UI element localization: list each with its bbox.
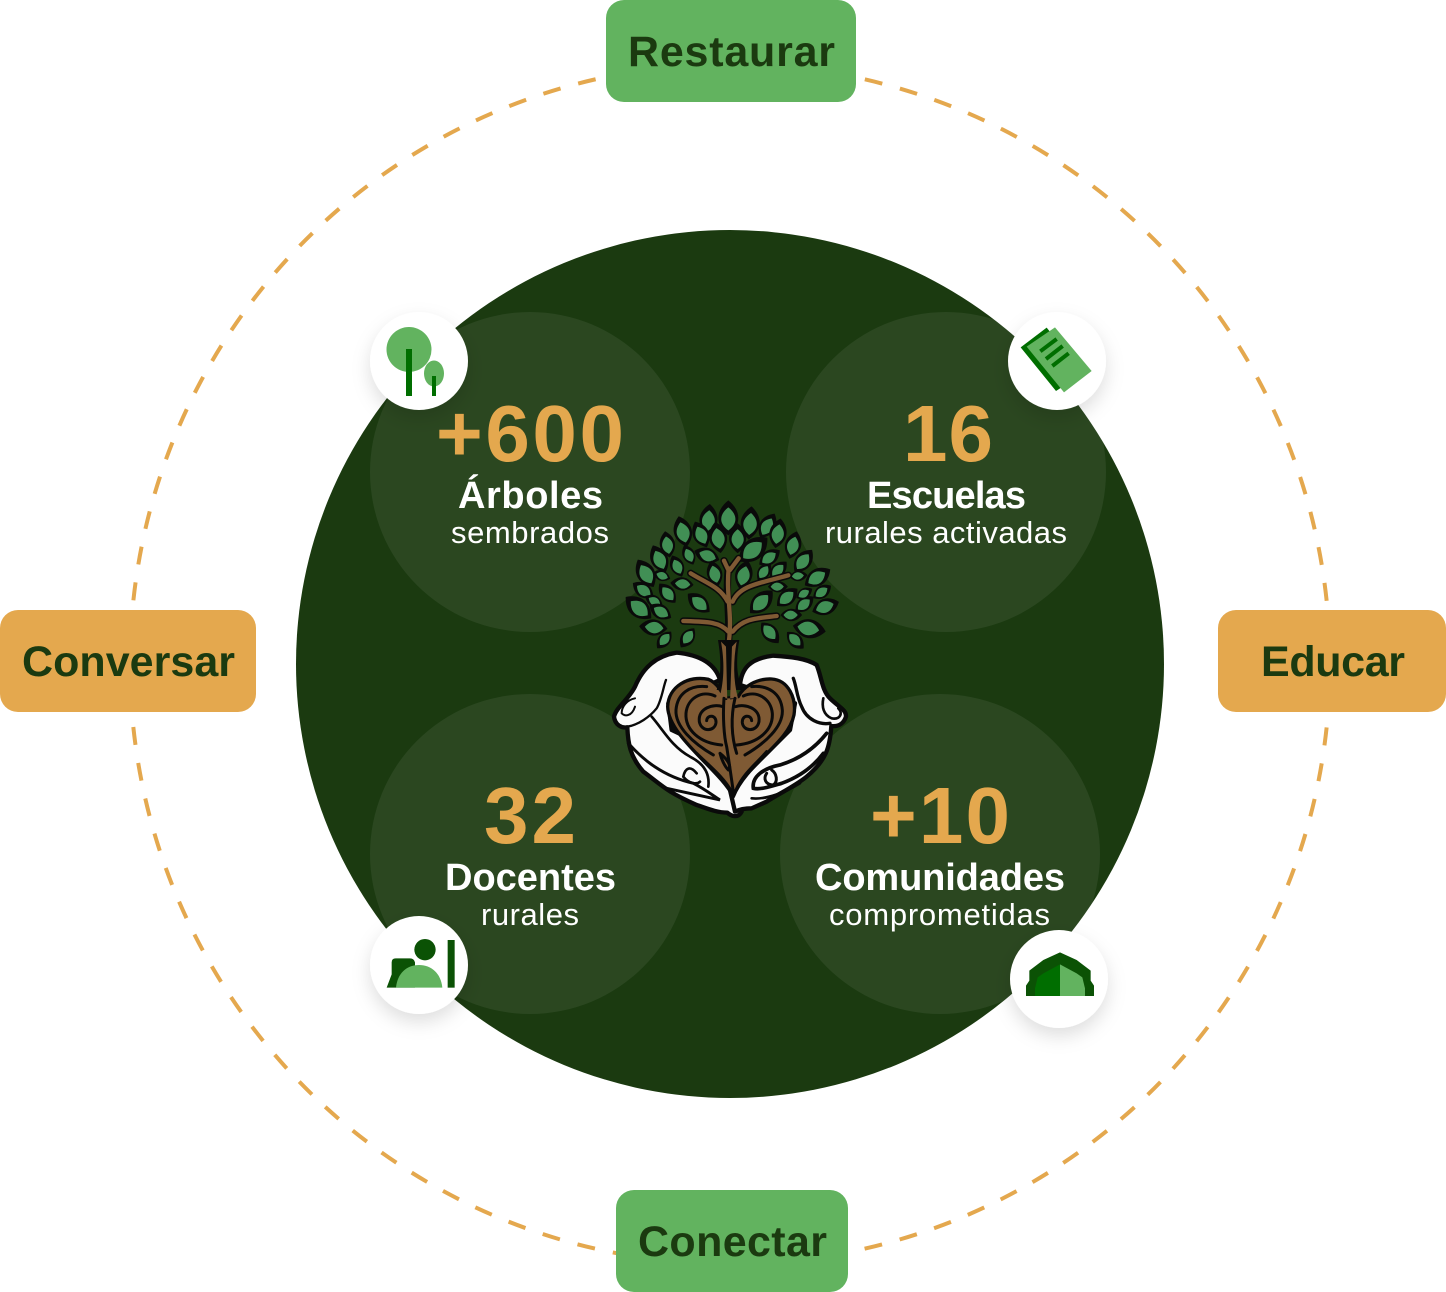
dashed ring [130, 64, 1330, 1264]
right spirals [736, 686, 782, 755]
central dark circle [296, 230, 1164, 1098]
badge: Educar: Educar [1261, 638, 1405, 686]
hand detail lines [622, 678, 841, 800]
heart [668, 678, 794, 797]
logo: tree growing from a heart held in two hands [614, 500, 846, 816]
number: 32: 32 [484, 771, 576, 860]
lower trunk [717, 640, 743, 703]
badge: Restaurar [606, 0, 856, 102]
right hand [730, 656, 846, 812]
number: +10: +10 [870, 771, 1010, 860]
panel: árboles [370, 312, 690, 632]
badge: Conversar [0, 610, 256, 712]
upper branches [683, 558, 788, 647]
panel: escuelas [786, 312, 1106, 632]
badge: Conversar: Conversar [22, 638, 235, 686]
left hand [614, 653, 742, 816]
heart spirals [676, 686, 782, 792]
badge: Conectar: Conectar [638, 1218, 827, 1266]
icon: teacher [370, 916, 468, 1014]
panel: comunidades [780, 694, 1100, 1014]
badge: Educar [1218, 610, 1446, 712]
badge: Conectar [616, 1190, 848, 1292]
label: Árboles: Árboles [458, 473, 603, 517]
sublabel: rurales activadas: rurales activadas [825, 515, 1067, 550]
panel: docentes [370, 694, 690, 1014]
number: +600: +600 [436, 389, 624, 478]
icon: book [1008, 312, 1106, 410]
left spirals [676, 686, 723, 755]
label: Comunidades: Comunidades [815, 857, 1065, 899]
leaves [620, 500, 842, 653]
number: 16: 16 [903, 389, 993, 478]
sublabel: sembrados: sembrados [451, 515, 609, 550]
icon: trees [370, 312, 468, 410]
label: Docentes: Docentes [445, 857, 616, 899]
icon: community [1010, 930, 1108, 1028]
badge: Restaurar: Restaurar [628, 28, 835, 76]
sublabel: rurales: rurales [481, 897, 579, 932]
sublabel: comprometidas: comprometidas [829, 897, 1050, 932]
label: Escuelas: Escuelas [867, 475, 1026, 517]
